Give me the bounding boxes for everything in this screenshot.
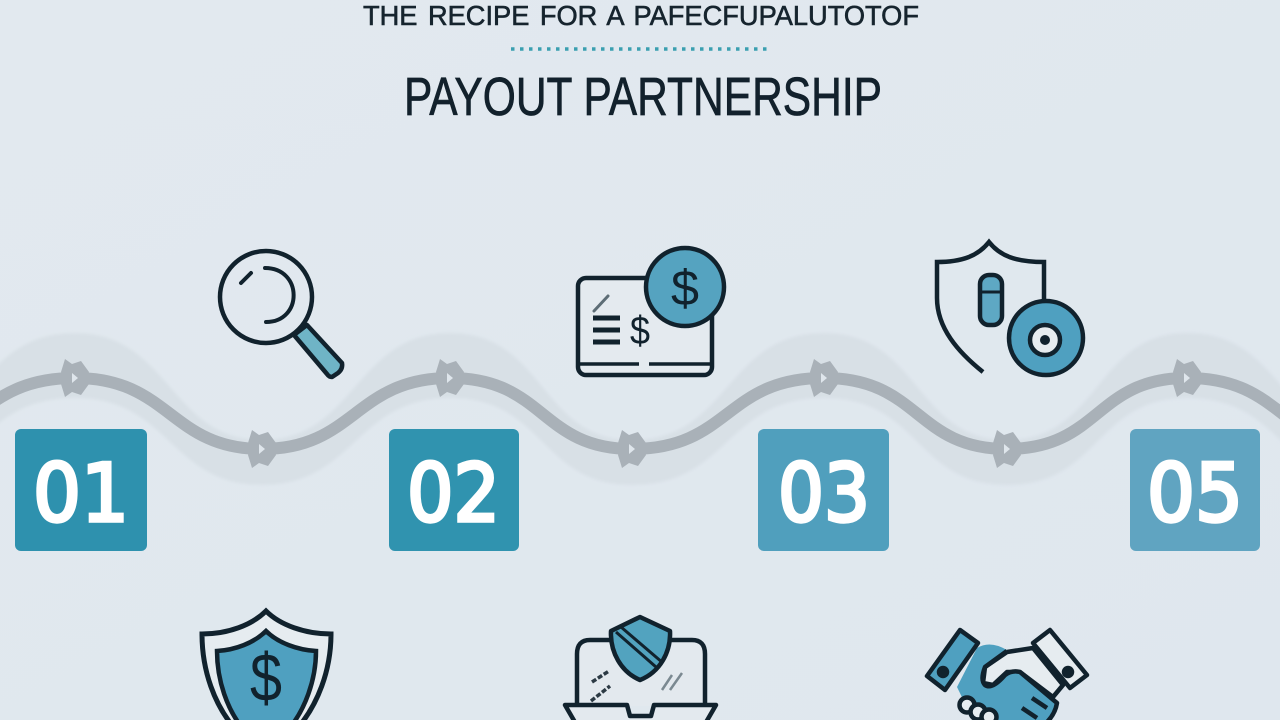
icon: magnifying glass <box>220 251 342 377</box>
step badge 03 <box>758 429 889 551</box>
wave timeline <box>0 333 1280 485</box>
step badge 05 <box>1130 429 1260 551</box>
wave halo <box>0 333 1280 485</box>
icon: shield with dollar: $ <box>250 640 282 716</box>
step badge 03: 03 <box>778 447 870 540</box>
icon: handshake <box>927 630 1087 720</box>
icon: shield with dollar <box>202 611 331 720</box>
icon: payment check with dollar coin: $ <box>630 309 650 353</box>
dotted divider <box>511 47 770 51</box>
step badge 02 <box>389 429 519 551</box>
title: top line: THE RECIPE FOR A PAFECFUPALUTOTOF <box>363 0 919 31</box>
icon: payment check with dollar coin <box>578 248 724 375</box>
step badge 02: 02 <box>407 447 500 540</box>
icon: laptop with shield <box>565 617 716 720</box>
step badge 01: 01 <box>33 447 129 540</box>
heading: payout partnership: PAYOUT PARTNERSHIP <box>404 67 882 127</box>
icon: payment check with dollar coin: $ <box>671 260 699 316</box>
icon: shield with target <box>937 242 1083 375</box>
step badge 05: 05 <box>1147 447 1243 540</box>
wave nodes <box>61 359 1201 468</box>
step badge 01 <box>15 429 147 551</box>
wave line <box>0 378 1280 449</box>
